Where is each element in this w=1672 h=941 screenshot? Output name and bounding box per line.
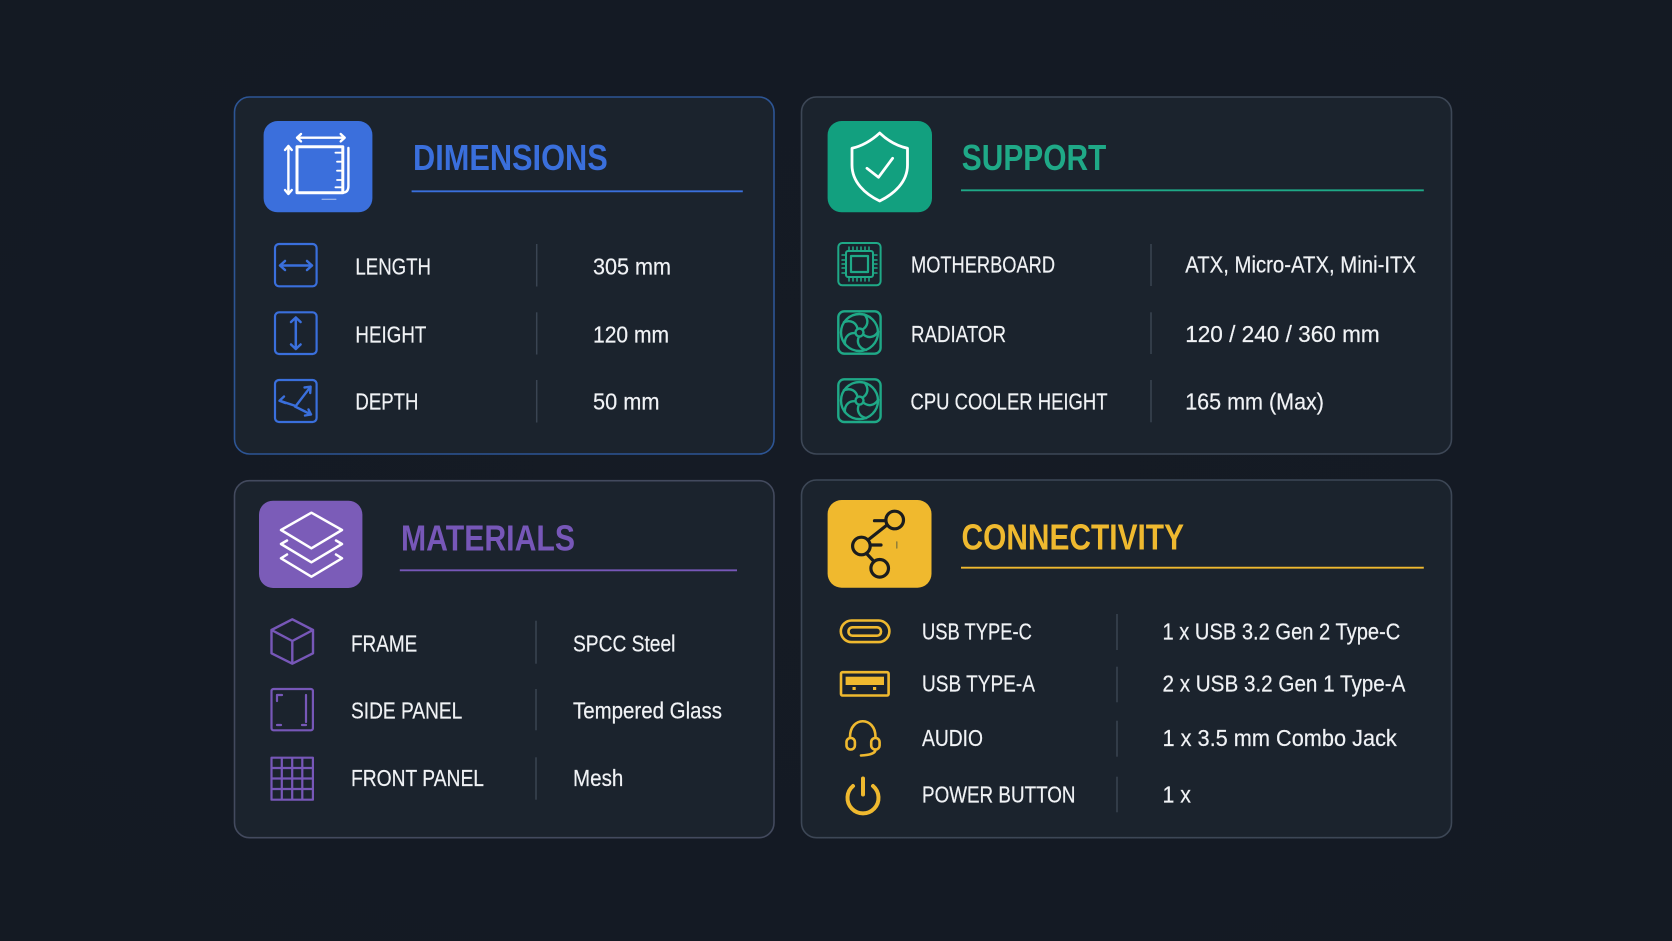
icon: dimensions tile [264, 121, 372, 212]
label: SIDE PANEL [351, 698, 462, 724]
panel: dimensions [234, 97, 774, 454]
label: DEPTH [355, 389, 418, 415]
row: front panel [272, 757, 623, 800]
heading: dimensions: DIMENSIONS [413, 137, 608, 178]
label: POWER BUTTON [922, 781, 1076, 807]
panel: connectivity [802, 480, 1452, 838]
row: usb type-a [841, 667, 1406, 702]
icon: side panel [272, 689, 313, 730]
icon: shield tile [828, 121, 932, 212]
value: SPCC Steel [573, 630, 675, 656]
icon: fan [838, 311, 881, 354]
row: side panel [272, 689, 722, 730]
icon: mesh grid [272, 758, 313, 800]
icon: network tile [828, 500, 932, 588]
row: power button [848, 777, 1191, 813]
heading: connectivity: CONNECTIVITY [962, 516, 1184, 557]
value: ATX, Micro-ATX, Mini-ITX [1185, 252, 1416, 278]
value: 50 mm [593, 389, 660, 415]
icon: usb-a port [841, 672, 889, 696]
panel: support [802, 97, 1452, 454]
value: 305 mm [593, 254, 671, 280]
panel: materials [234, 481, 774, 838]
icon: depth arrows [275, 380, 317, 422]
icon: layers tile [259, 501, 362, 588]
row: depth [275, 380, 660, 422]
value: 120 mm [593, 322, 669, 348]
row: length [275, 244, 671, 286]
value: 2 x USB 3.2 Gen 1 Type-A [1162, 671, 1406, 697]
heading: materials: MATERIALS [401, 518, 575, 559]
value: Tempered Glass [573, 698, 722, 724]
row: motherboard [838, 243, 1416, 286]
value: 165 mm (Max) [1185, 388, 1324, 414]
label: FRAME [351, 630, 417, 656]
icon: vertical arrow [275, 312, 317, 354]
icon: horizontal arrow [275, 244, 317, 286]
label: CPU COOLER HEIGHT [910, 388, 1108, 414]
row: radiator [838, 311, 1380, 354]
value: 1 x USB 3.2 Gen 2 Type-C [1162, 618, 1400, 644]
row: cpu cooler height [838, 379, 1324, 422]
row: height [275, 312, 669, 354]
icon: power [848, 778, 878, 813]
label: LENGTH [355, 254, 431, 280]
icon: fan [838, 379, 881, 422]
row: usb type-c [841, 614, 1400, 650]
row: frame [272, 619, 675, 664]
value: 120 / 240 / 360 mm [1185, 321, 1380, 347]
value: Mesh [573, 765, 623, 791]
icon: chip [838, 243, 881, 285]
row: audio [846, 721, 1397, 757]
label: AUDIO [922, 725, 983, 751]
heading: support: SUPPORT [962, 137, 1106, 178]
icon: usb-c port [841, 620, 889, 642]
value: 1 x [1162, 781, 1191, 807]
value: 1 x 3.5 mm Combo Jack [1162, 725, 1397, 751]
label: FRONT PANEL [351, 765, 484, 791]
label: RADIATOR [911, 321, 1006, 347]
label: USB TYPE-C [922, 618, 1032, 644]
label: HEIGHT [355, 322, 426, 348]
label: USB TYPE-A [922, 671, 1035, 697]
icon: cube [272, 619, 313, 664]
label: MOTHERBOARD [911, 252, 1055, 278]
icon: headset [846, 721, 880, 756]
